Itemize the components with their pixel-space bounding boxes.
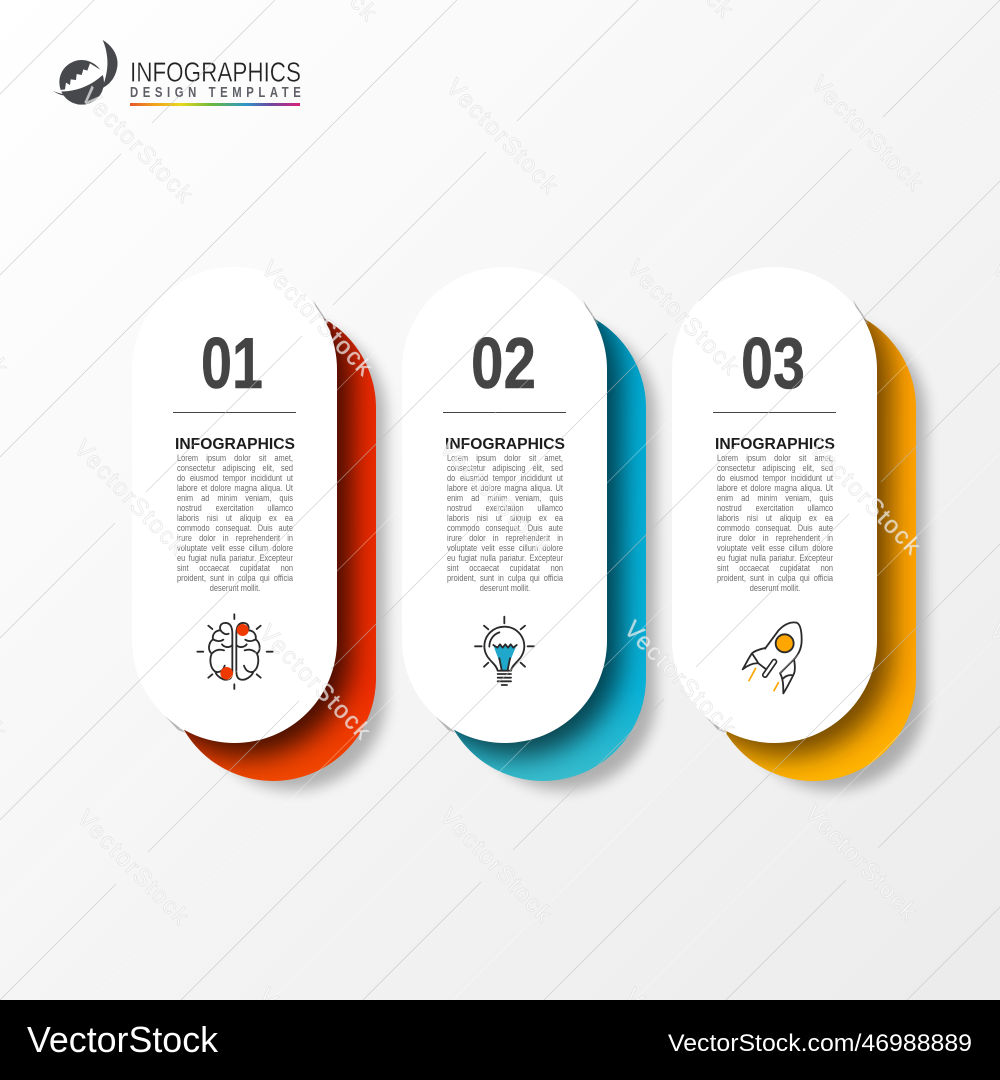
logo: infographics design template — [54, 40, 301, 106]
body text: Lorem ipsum dolor sit amet, — [447, 453, 563, 463]
watermark overlay: VectorStock — [254, 620, 376, 746]
body text: sint occaecat cupidatat non — [717, 563, 833, 573]
white front capsule — [402, 267, 607, 743]
body text: labore et dolore magna aliqua. Ut — [447, 483, 563, 493]
watermark overlay: VectorStock — [434, 435, 556, 561]
panel: step 03 — [672, 267, 934, 798]
drop shadow — [200, 322, 386, 790]
body text: nostrud exercitation ullamco — [447, 503, 563, 513]
coloured back capsule — [724, 318, 916, 781]
body text: do eiusmod tempor incididunt ut — [717, 473, 833, 483]
curl shadows — [705, 300, 869, 733]
logo: infographics design template: DESIGN TEMPLATE — [130, 84, 301, 100]
body text: laboris nisi ut aliquip ex ea — [447, 513, 563, 523]
panel: step 01 — [141, 300, 394, 798]
body text: consectetur adipiscing elit, sed — [447, 463, 563, 473]
footer image id: VectorStock.com/46988889 — [668, 1030, 972, 1057]
body text: do eiusmod tempor incididunt ut — [447, 473, 563, 483]
body text: deserunt mollit. — [480, 583, 530, 593]
coloured back capsule — [184, 318, 376, 781]
curl shadows — [435, 300, 599, 733]
watermark overlay: VectorStock — [69, 435, 191, 561]
body text — [717, 453, 833, 593]
body text: irure dolor in reprehenderit in — [177, 533, 293, 543]
body text: sint occaecat cupidatat non — [447, 563, 563, 573]
watermark overlay: VectorStock — [441, 74, 563, 200]
body text: laboris nisi ut aliquip ex ea — [717, 513, 833, 523]
body text — [447, 453, 563, 593]
panel: step 02 — [402, 276, 664, 798]
watermark overlay: VectorStock — [619, 616, 741, 742]
body text: Lorem ipsum dolor sit amet, — [177, 453, 293, 463]
body text: commodo consequat. Duis aute — [717, 523, 833, 533]
body text: voluptate velit esse cillum dolore — [447, 543, 563, 553]
body text: irure dolor in reprehenderit in — [717, 533, 833, 543]
body text: enim ad minim veniam, quis — [447, 493, 563, 503]
body text: eu fugiat nulla pariatur. Excepteur — [177, 553, 293, 563]
body text: Lorem ipsum dolor sit amet, — [717, 453, 833, 463]
body text: irure dolor in reprehenderit in — [447, 533, 563, 543]
watermark overlay: VectorStock — [435, 803, 557, 929]
drop shadow — [740, 322, 926, 790]
white front capsule — [672, 267, 877, 743]
watermark overlay: VectorStock — [256, 256, 378, 382]
watermark overlay: VectorStock — [806, 71, 928, 197]
footer brand: VectorStock — [27, 1019, 219, 1060]
body text: enim ad minim veniam, quis — [177, 493, 293, 503]
icon: rocket — [743, 622, 802, 693]
body text: proident, sunt in culpa qui officia — [177, 573, 293, 583]
body text: nostrud exercitation ullamco — [717, 503, 833, 513]
curl shadows — [165, 300, 329, 733]
icon: brain — [197, 614, 273, 689]
body text: commodo consequat. Duis aute — [447, 523, 563, 533]
body text: labore et dolore magna aliqua. Ut — [177, 483, 293, 493]
body text: consectetur adipiscing elit, sed — [717, 463, 833, 473]
divider — [713, 412, 836, 414]
coloured back capsule — [454, 318, 646, 781]
watermark overlay: VectorStock — [804, 435, 926, 561]
body text: sint occaecat cupidatat non — [177, 563, 293, 573]
body text: commodo consequat. Duis aute — [177, 523, 293, 533]
footer bar — [0, 1000, 1000, 1080]
heading: INFOGRAPHICS — [445, 436, 565, 453]
watermark overlay: VectorStock — [800, 800, 922, 926]
body text: proident, sunt in culpa qui officia — [717, 573, 833, 583]
body text: nostrud exercitation ullamco — [177, 503, 293, 513]
body text: voluptate velit esse cillum dolore — [717, 543, 833, 553]
body text: proident, sunt in culpa qui officia — [447, 573, 563, 583]
body text: labore et dolore magna aliqua. Ut — [717, 483, 833, 493]
body text: deserunt mollit. — [750, 583, 800, 593]
white front capsule — [132, 267, 337, 743]
body text: do eiusmod tempor incididunt ut — [177, 473, 293, 483]
number 03: 03 — [741, 324, 805, 404]
body text: eu fugiat nulla pariatur. Excepteur — [447, 553, 563, 563]
body text: enim ad minim veniam, quis — [717, 493, 833, 503]
heading: INFOGRAPHICS — [715, 436, 835, 453]
number 02: 02 — [471, 324, 536, 404]
icon: light bulb — [475, 617, 534, 685]
body text: eu fugiat nulla pariatur. Excepteur — [717, 553, 833, 563]
body text: voluptate velit esse cillum dolore — [177, 543, 293, 553]
body text: deserunt mollit. — [210, 583, 260, 593]
heading: INFOGRAPHICS — [175, 436, 295, 453]
body text — [177, 453, 293, 593]
divider — [443, 412, 566, 414]
divider — [173, 412, 296, 414]
watermark overlay: VectorStock — [622, 255, 744, 381]
number 01: 01 — [201, 324, 263, 404]
body text: laboris nisi ut aliquip ex ea — [177, 513, 293, 523]
watermark overlay: VectorStock — [76, 83, 198, 209]
watermark overlay: VectorStock — [72, 805, 194, 931]
body text: consectetur adipiscing elit, sed — [177, 463, 293, 473]
drop shadow — [470, 322, 656, 790]
